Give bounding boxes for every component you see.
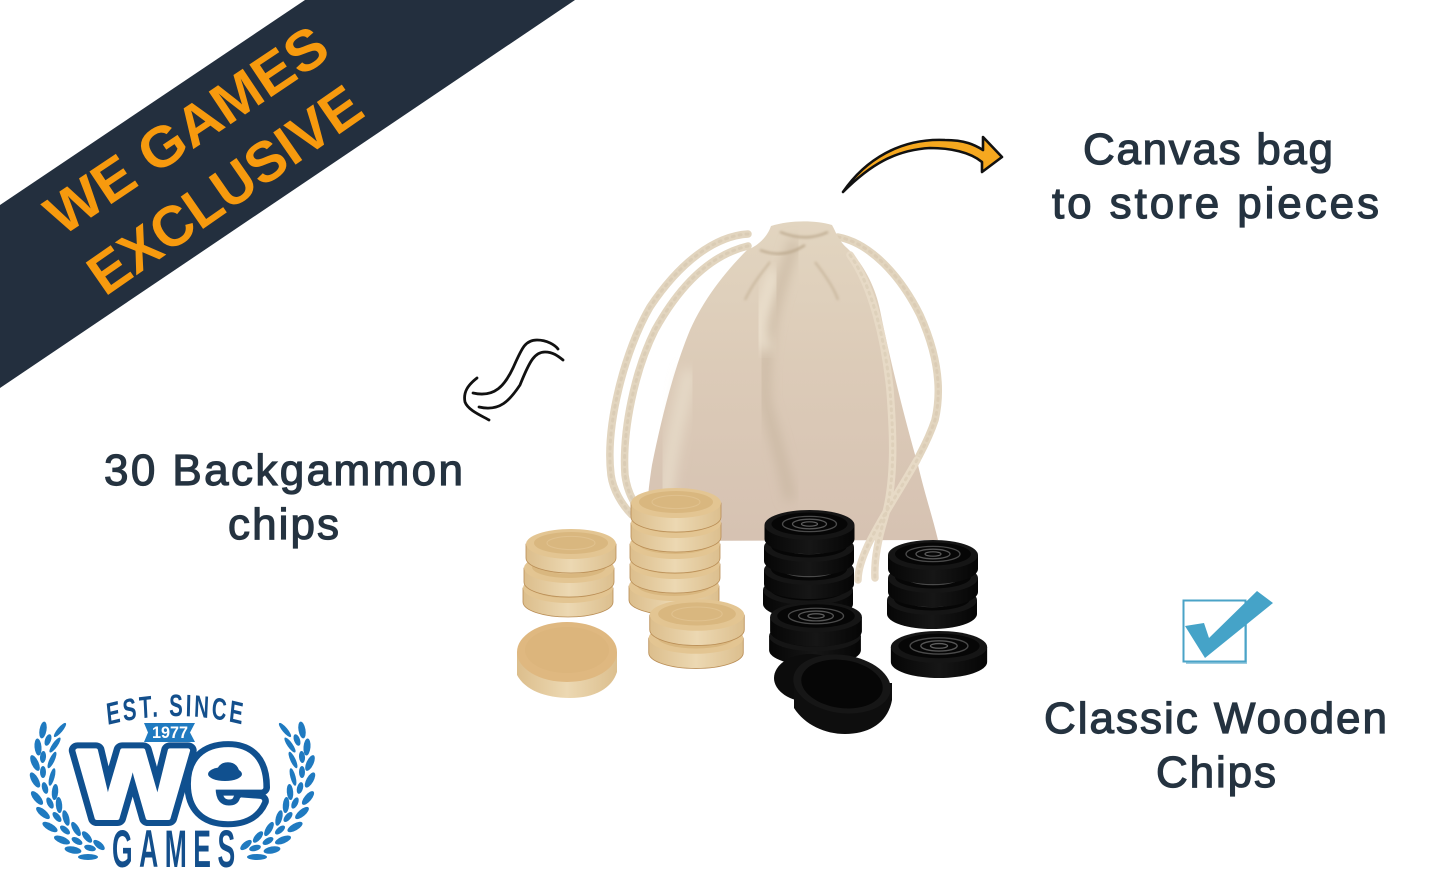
label: classic wooden chips: Chips (1156, 748, 1276, 797)
label: backgammon chips: chips (228, 500, 339, 549)
banner ribbon (0, 0, 575, 388)
wood chip stack: left (523, 529, 616, 617)
label: canvas bag (1052, 125, 1379, 228)
logo wordmark: we (77, 703, 266, 846)
wood chip stack: front pair (649, 599, 744, 668)
canvas drawstring bag (610, 221, 938, 580)
logo year ribbon: 1977 (152, 723, 188, 742)
black chip stack: front pair (769, 602, 862, 666)
wood chip stack: tall (629, 488, 721, 615)
arrow: orange curved arrow to canvas bag label (843, 137, 1002, 192)
label: canvas bag: to store pieces (1052, 179, 1379, 228)
label: backgammon chips (104, 446, 463, 549)
bag ropes in front (850, 255, 917, 580)
black chip: single right (891, 631, 987, 678)
label: classic wooden chips (1044, 694, 1387, 797)
bag ropes behind (610, 234, 938, 515)
banner text: EXCLUSIVE: EXCLUSIVE (76, 73, 374, 308)
logo arc text: EST. SINCE (106, 694, 243, 725)
logo wordmark: we (77, 703, 266, 846)
label: canvas bag: Canvas bag (1083, 125, 1333, 174)
label: backgammon chips: 30 Backgammon (104, 446, 463, 495)
black chips: lying front (774, 648, 895, 734)
wood chip: lying flat (517, 622, 617, 698)
logo GAMES: GAMES (112, 819, 242, 878)
bag folds (665, 232, 838, 500)
black chip stack: right (887, 540, 978, 629)
bag body (647, 221, 938, 541)
arrow: black squiggle to backgammon chips label (465, 340, 563, 420)
banner text: WE GAMES: WE GAMES (34, 13, 340, 248)
label: classic wooden chips: Classic Wooden (1044, 694, 1387, 743)
logo laurel (28, 721, 106, 860)
logo laurel mirrored (239, 721, 317, 860)
WE Games logo (30, 694, 316, 878)
black chip stack: rear (763, 510, 854, 619)
icon: check box (1184, 591, 1273, 664)
